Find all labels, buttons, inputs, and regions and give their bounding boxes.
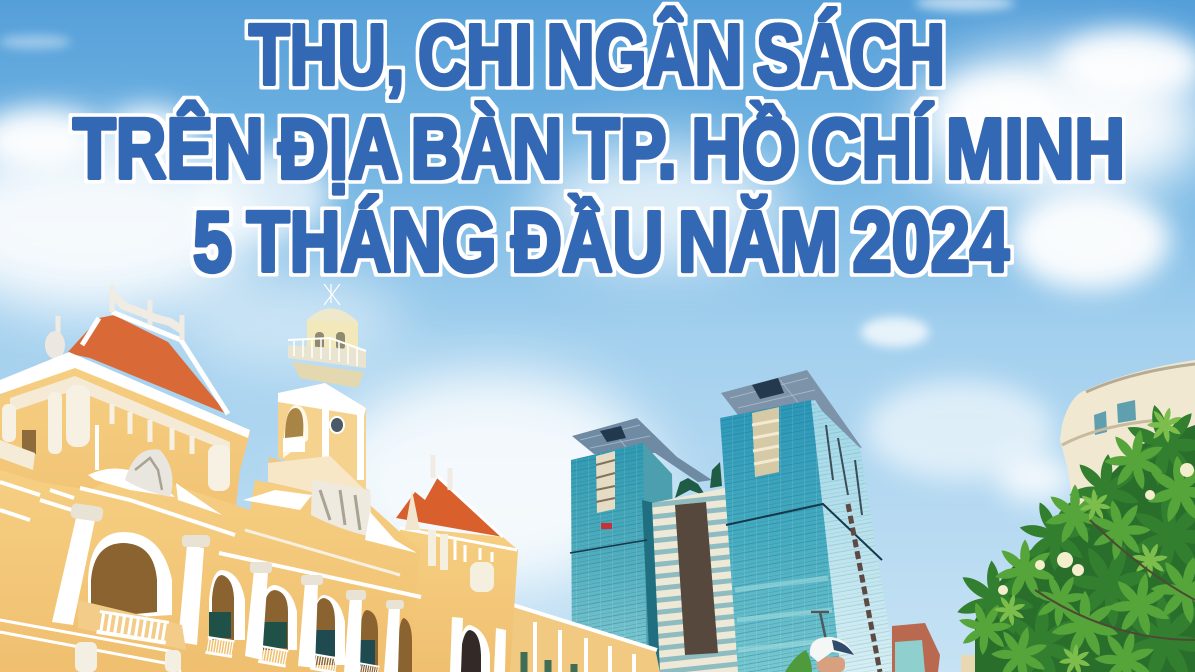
cornice (0, 352, 250, 438)
city hall building (0, 284, 660, 672)
clock tower (269, 457, 371, 560)
left pavilion wall (0, 358, 250, 560)
palm (675, 462, 722, 498)
left tower (571, 443, 667, 672)
right tower front (720, 400, 841, 672)
right tower roof (721, 370, 862, 448)
ornaments (2, 385, 230, 491)
right tower side (811, 400, 896, 672)
tree (947, 403, 1195, 672)
title (73, 7, 1125, 290)
right pavilion (395, 527, 518, 672)
small background buildings and lamp (811, 612, 979, 672)
centre block (652, 488, 738, 672)
white cornice bands (0, 482, 74, 520)
left roof (67, 315, 227, 414)
wing (500, 600, 660, 672)
statues and pediments (88, 469, 175, 497)
columns (52, 503, 506, 672)
arches (88, 532, 490, 672)
rounded cream building at right (1060, 360, 1195, 520)
title line 3: 5 THÁNG ĐẦU NĂM 2024 (193, 194, 1009, 290)
title line 1: THU, CHI NGÂN SÁCH (249, 7, 945, 103)
flowers (998, 463, 1194, 595)
glass towers (570, 370, 896, 672)
main lower body (0, 470, 420, 672)
palm and motorbike rider (785, 637, 854, 672)
balconies (78, 600, 380, 672)
left tower roof (572, 418, 712, 482)
